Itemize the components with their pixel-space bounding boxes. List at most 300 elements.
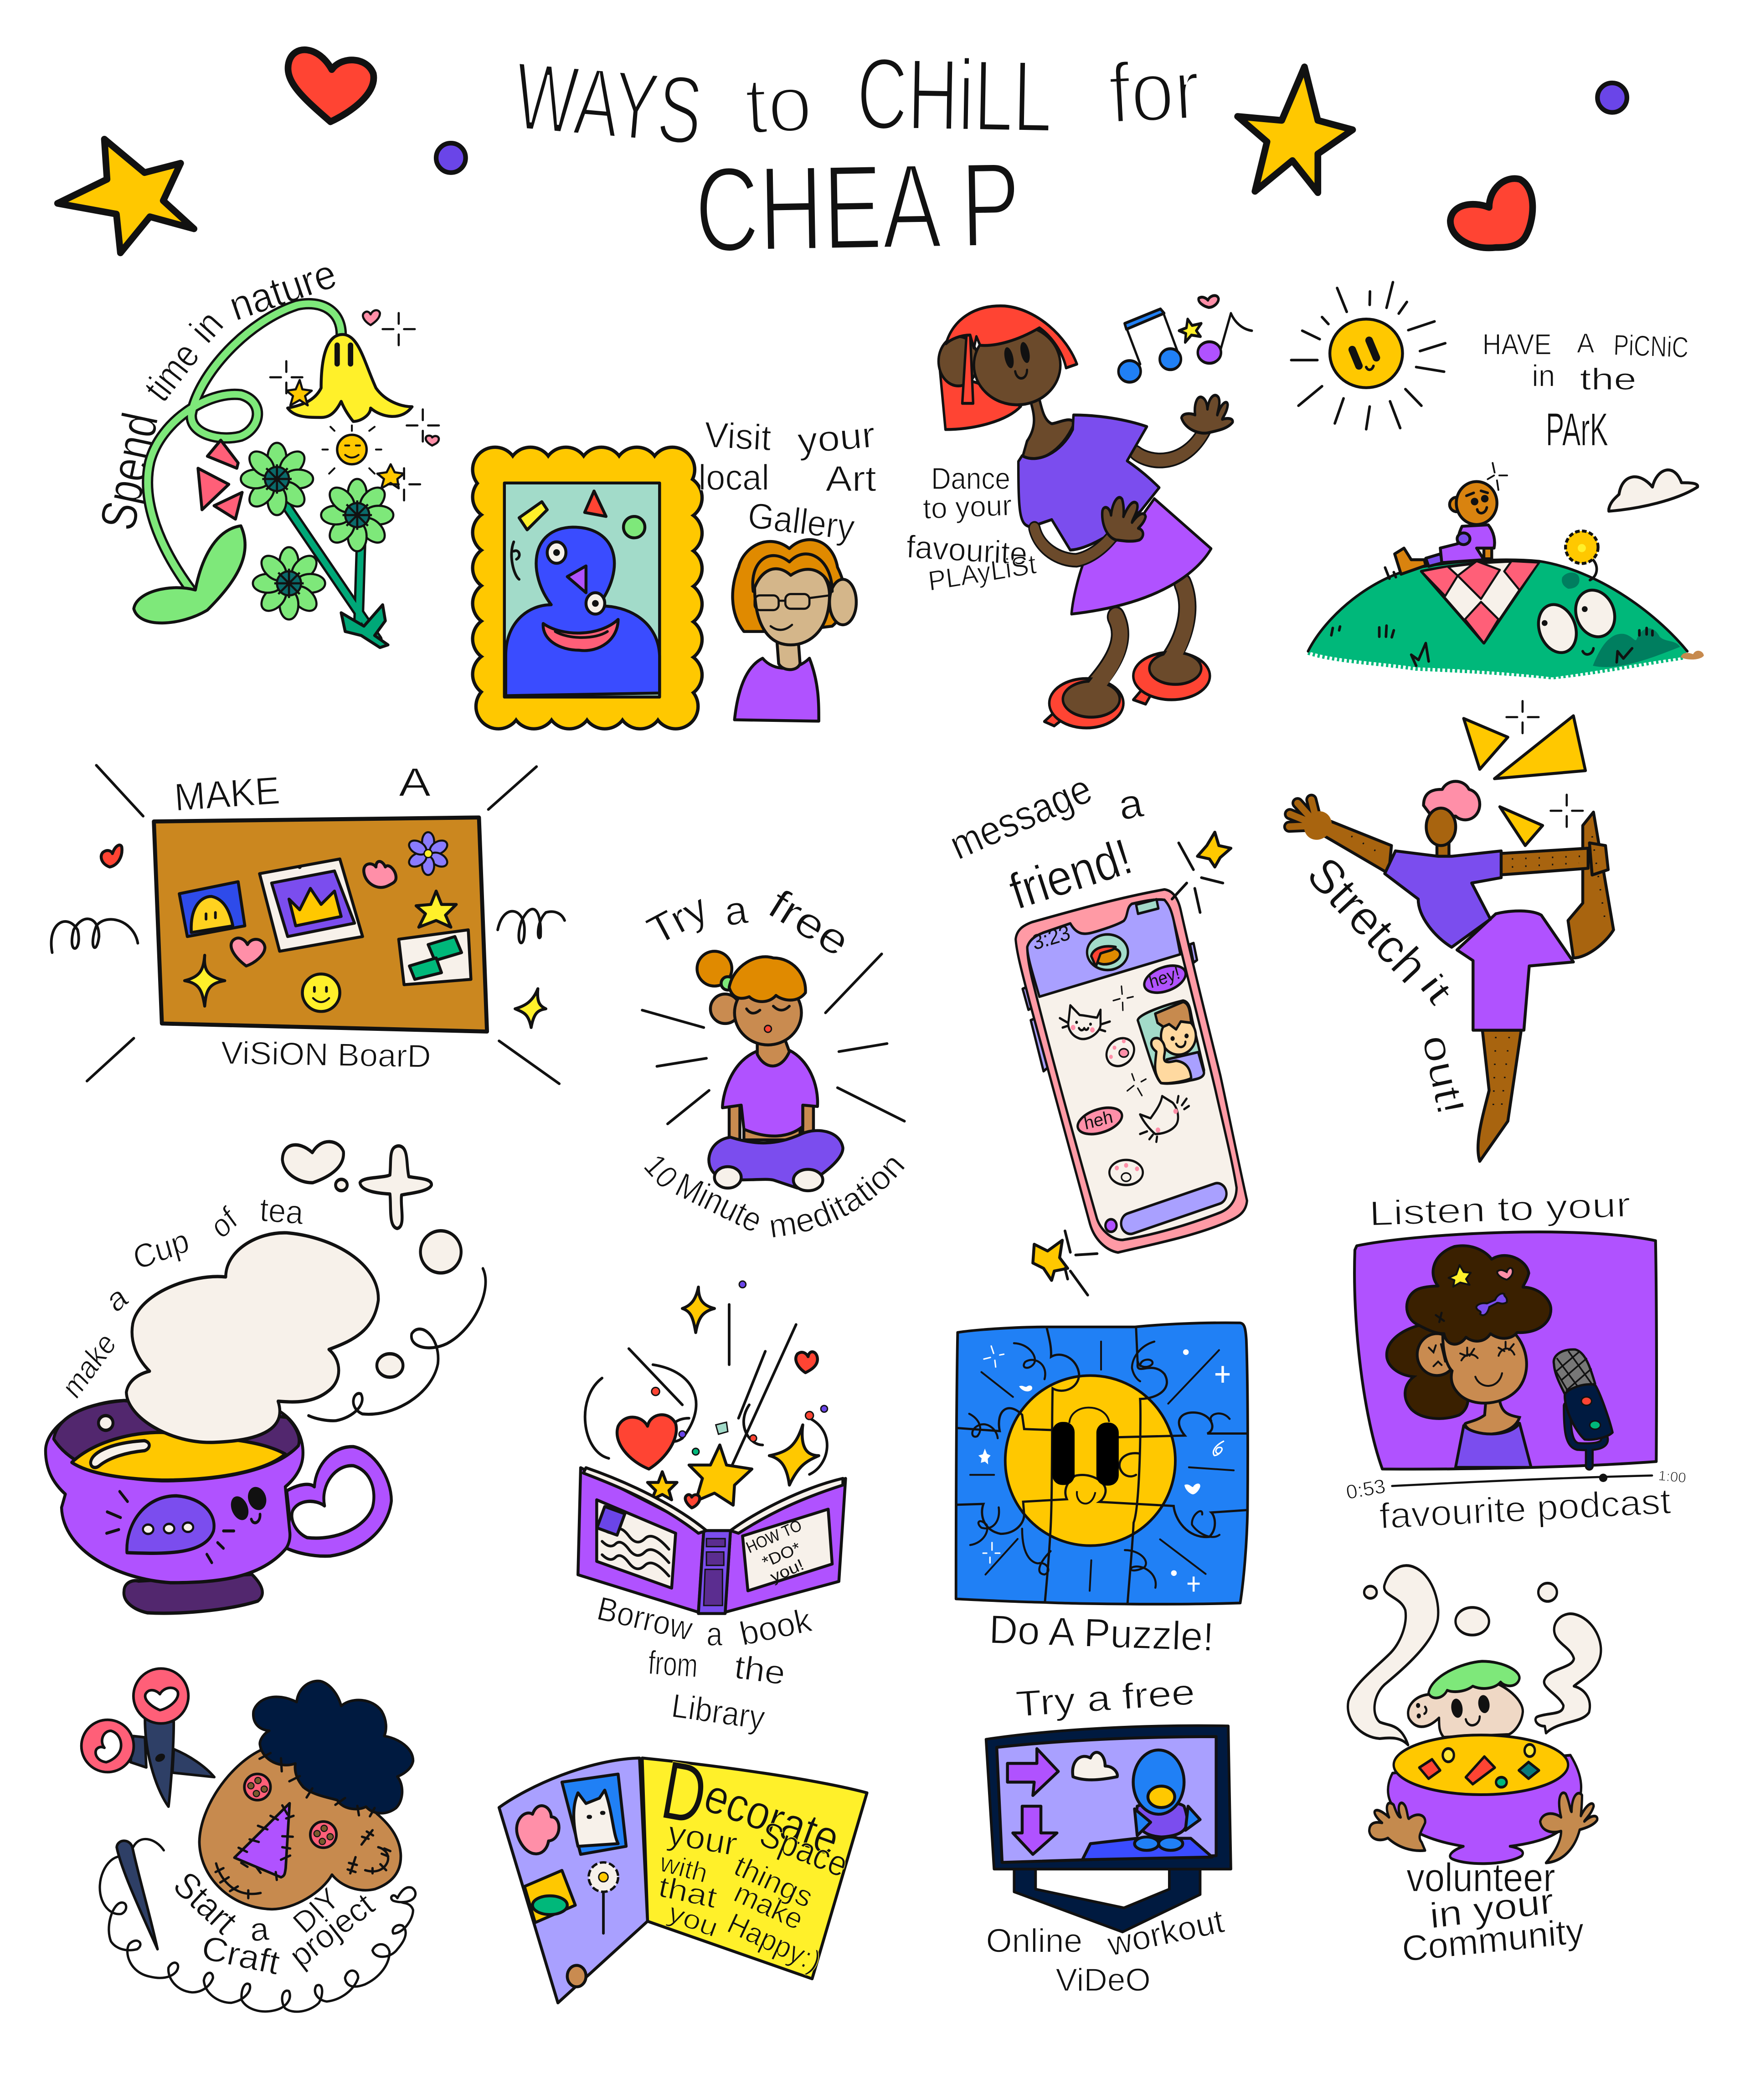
label: Library (669, 1687, 767, 1737)
send dot (1106, 1219, 1117, 1232)
tiny sun (323, 426, 381, 474)
label: spend time in nature: in (182, 302, 232, 351)
spine (698, 1531, 731, 1614)
cat doodle 2 (1140, 1096, 1189, 1142)
label: Community (1400, 1910, 1585, 1969)
label: favourite (906, 529, 1028, 571)
bowl body (1388, 1755, 1581, 1863)
back hair (940, 371, 1021, 429)
podcast illustration (1344, 1185, 1687, 1536)
text on page: ecorate (697, 1768, 847, 1866)
label: tea (259, 1191, 305, 1231)
neck (1022, 399, 1074, 460)
rays (642, 954, 905, 1124)
panel: message a friend (943, 766, 1247, 1295)
left page (597, 1500, 676, 1588)
small red heart (796, 1352, 818, 1373)
star: top right (1238, 67, 1353, 193)
side sparkle (769, 1425, 819, 1485)
clover shadow (1562, 572, 1580, 589)
label: ViSiON BoarD (221, 1035, 431, 1074)
label: start a diy (165, 1864, 346, 1949)
label: a (100, 1277, 134, 1320)
label: 10 minute meditation (637, 1146, 912, 1245)
panel: do a puzzle (956, 1323, 1248, 1659)
legs (709, 1131, 843, 1188)
hair (253, 1681, 413, 1813)
head (1408, 1677, 1523, 1737)
left cover (578, 1468, 704, 1612)
star bottom (1033, 1240, 1068, 1281)
steam bubbles (1364, 1583, 1557, 1635)
left hand (1369, 1803, 1425, 1851)
side buttons (1023, 943, 1197, 1071)
book page text: *DO* (760, 1539, 803, 1571)
hill face (1532, 585, 1621, 658)
legs over shoes (1094, 583, 1187, 690)
label (906, 462, 1038, 597)
friend photo (1138, 1001, 1204, 1084)
stitches (216, 1753, 390, 1898)
screen (997, 1737, 1216, 1863)
dot: purple right (1597, 83, 1627, 113)
right page (742, 1509, 832, 1591)
face features (1429, 1342, 1514, 1386)
pink flower (517, 1806, 559, 1854)
dark patch (1593, 628, 1680, 667)
label: workout: workout (1104, 1902, 1227, 1963)
text on page: that (656, 1870, 720, 1915)
speech bubble (127, 1496, 214, 1553)
sparkle yellow (682, 1287, 715, 1333)
title: for (1107, 41, 1202, 141)
label (698, 414, 877, 548)
text on page: make (729, 1876, 808, 1936)
side band (962, 335, 973, 403)
right steam (1535, 1614, 1601, 1733)
spine details (704, 1539, 725, 1606)
smile (1015, 370, 1027, 378)
sun rays (1291, 282, 1445, 429)
money card (399, 930, 471, 985)
smiley (302, 974, 340, 1011)
yellow triangles (1464, 716, 1585, 845)
person on hill (1395, 482, 1497, 574)
battery (1136, 899, 1158, 914)
label: spend time in nature: nature (223, 251, 342, 329)
label: start a diy: DIY (286, 1881, 346, 1940)
soup items (1419, 1745, 1539, 1787)
label: the (1580, 362, 1637, 396)
cup smile (251, 1514, 260, 1523)
waving hand (1181, 395, 1233, 433)
label: favourite podcast: favourite podcast (1378, 1481, 1672, 1536)
clock: 3:23 (1030, 921, 1072, 955)
text on page: with (656, 1848, 711, 1889)
label: craft project: project (283, 1886, 381, 1975)
hair star (1449, 1265, 1471, 1287)
head (735, 981, 802, 1045)
cream circle (421, 1231, 461, 1273)
hair candy (1476, 1293, 1507, 1315)
panel: online workout video (986, 1671, 1231, 1997)
pink heart (364, 861, 396, 887)
label: start a diy: Start (165, 1864, 245, 1942)
leaf (134, 526, 245, 623)
foot leaf (341, 605, 388, 648)
label: your (796, 414, 877, 461)
hair (729, 957, 806, 1002)
right cover (725, 1478, 845, 1612)
needle (117, 1841, 158, 1949)
panel: start a DIY craft project (82, 1668, 416, 2012)
daisy (1565, 531, 1598, 580)
yellow flower (288, 335, 412, 422)
panel: volunteer in your community (1348, 1565, 1601, 1969)
label (1297, 847, 1473, 1118)
sparkles (1113, 986, 1146, 1096)
text on page: Happy:) (722, 1907, 826, 1978)
label: a (1115, 780, 1147, 829)
label: Do A Puzzle! (988, 1606, 1215, 1659)
nose arc (1069, 1408, 1109, 1503)
lines near star bottom (1065, 1231, 1097, 1295)
hair (1424, 781, 1480, 820)
neck (1437, 836, 1449, 858)
sparkle lines (1488, 463, 1507, 490)
ear (938, 336, 978, 386)
cloud (1609, 470, 1698, 511)
label: friend! (1003, 828, 1138, 920)
label: in (1532, 359, 1555, 393)
text on page: you (664, 1898, 722, 1943)
front arm (1035, 528, 1116, 560)
purple screen (1354, 1232, 1657, 1469)
heart: top left (288, 50, 374, 122)
purple patch (234, 1803, 289, 1877)
phone body (1016, 890, 1247, 1252)
mouth (765, 1025, 772, 1032)
tea (72, 1432, 285, 1480)
label: 10 minute meditation: Minute (669, 1166, 768, 1240)
label: PArK (1546, 404, 1608, 456)
skirt (1457, 911, 1573, 1030)
swirls (969, 1342, 1230, 1588)
cat doodle (1060, 1005, 1110, 1039)
tiny heart (685, 1495, 700, 1508)
book page text: you! (767, 1556, 807, 1586)
skirt (1071, 499, 1211, 614)
grass edge (1308, 653, 1683, 677)
green stem (148, 304, 341, 589)
confetti dots (652, 1281, 828, 1455)
panel: 10 minute meditation (637, 880, 912, 1245)
head (1426, 808, 1456, 845)
front hair (1407, 1246, 1551, 1344)
rays (970, 1342, 1234, 1591)
left page (499, 1758, 648, 2003)
text on page (655, 1743, 854, 1978)
standing leg (1478, 1030, 1521, 1161)
cork board (154, 818, 487, 1031)
daisy (589, 1863, 618, 1933)
text on page: D (655, 1743, 714, 1842)
hill (1308, 560, 1687, 677)
closed eyes (746, 1006, 789, 1013)
arrow down (1013, 1806, 1057, 1854)
elapsed time: 0:53 (1344, 1475, 1387, 1504)
label: a (706, 1616, 722, 1653)
mic stand inner (1567, 1406, 1605, 1466)
fringe (946, 306, 1077, 368)
hair band (721, 977, 735, 990)
label: MAKE (173, 769, 281, 819)
title: to (743, 58, 814, 151)
panel: dance to your favourite playlist (906, 296, 1252, 728)
penguin (1133, 1750, 1200, 1850)
label: listen to your: Listen to your (1369, 1185, 1631, 1233)
star: top left (57, 139, 194, 253)
title: CHEA P (694, 137, 1021, 277)
panel: visit your local art gallery (489, 414, 877, 721)
back hair (1387, 1326, 1468, 1419)
small heart (101, 845, 122, 867)
burst lines (629, 1304, 796, 1472)
shirt (1019, 415, 1159, 550)
label: volunteer (1406, 1855, 1555, 1900)
phone (1016, 890, 1247, 1252)
cup base (124, 1575, 262, 1613)
avatar (1087, 934, 1128, 970)
legs (1086, 583, 1187, 694)
tiny head (567, 1966, 586, 1987)
doll body (199, 1750, 401, 1909)
foot hand (1590, 843, 1608, 875)
picnic blanket (1421, 561, 1539, 643)
cup handle (285, 1446, 391, 1556)
title: WAYS (510, 42, 706, 165)
left hand (1284, 794, 1339, 847)
label: A (1577, 328, 1595, 359)
cup interior (54, 1400, 299, 1481)
x mark (1436, 1313, 1444, 1322)
face (1443, 1328, 1527, 1403)
mic stand (1567, 1406, 1605, 1466)
cup eyes (227, 1483, 270, 1524)
stand (1014, 1868, 1200, 1932)
monitor (986, 1726, 1231, 1869)
book page text: HOW TO (743, 1517, 804, 1557)
shirt (722, 1050, 818, 1136)
sparkle on board (185, 955, 225, 1006)
label: in your (1428, 1881, 1555, 1936)
feet (715, 1167, 823, 1191)
label: craft project: Craft (198, 1928, 283, 1982)
label: HAVE (1482, 328, 1552, 360)
sparkles (1507, 701, 1583, 827)
label: make (56, 1325, 122, 1405)
mic buttons (1581, 1397, 1601, 1429)
label: try a free: Try (640, 885, 715, 953)
label (56, 1191, 305, 1405)
flowers (241, 443, 393, 619)
progress knob (1599, 1474, 1607, 1482)
brown pebble (1681, 651, 1704, 659)
bubble: heh: heh (1082, 1107, 1115, 1133)
label: spend time in nature: time (136, 334, 208, 409)
lines near star top (1172, 843, 1223, 912)
paw prints (1102, 1033, 1143, 1185)
cloud (1073, 1752, 1117, 1780)
progress bar (1392, 1476, 1652, 1486)
label: spend time in nature (89, 251, 342, 535)
stems (283, 502, 377, 639)
right shoe (1133, 652, 1210, 704)
eyes (1052, 1422, 1119, 1486)
big star (689, 1445, 752, 1505)
label (943, 766, 1147, 920)
rim bubble (98, 1415, 113, 1431)
small circle (335, 1179, 347, 1191)
label: try a free: a (721, 886, 750, 934)
right arm (1136, 429, 1205, 460)
panel: listen to your favourite podcast (1344, 1185, 1687, 1536)
panel: make a vision board (51, 760, 565, 1084)
arrow right (1008, 1749, 1058, 1796)
star top (1198, 832, 1231, 867)
cup body (46, 1400, 303, 1583)
label: from (647, 1644, 699, 1684)
steam cloud (126, 1233, 378, 1442)
bubble dots (143, 1523, 193, 1534)
eyes (1416, 1694, 1491, 1719)
header (1027, 900, 1180, 997)
ear (1417, 1333, 1457, 1375)
frog poster (525, 1870, 575, 1923)
pink heart small (231, 938, 265, 966)
swirls (585, 1364, 827, 1474)
scissors (82, 1668, 214, 1807)
person with glasses (733, 540, 856, 721)
bun (697, 951, 732, 986)
large red heart (617, 1415, 676, 1469)
grass marks (1331, 567, 1652, 666)
shirt (1385, 851, 1501, 947)
panel: spend time in nature (89, 251, 439, 648)
panel: stretch it out (1284, 701, 1614, 1161)
right page (642, 1758, 867, 1979)
raised leg (1568, 812, 1614, 958)
cat poster (562, 1774, 626, 1854)
label: Visit (703, 414, 772, 458)
label: to your (922, 489, 1012, 525)
title: CHiLL (856, 37, 1053, 154)
yellow star (416, 891, 456, 927)
neck (757, 1037, 789, 1066)
grille lines (1554, 1351, 1591, 1392)
thread scallop (100, 1839, 416, 2012)
yellow sun (1005, 1375, 1175, 1546)
painting (504, 483, 659, 697)
text on page: your (665, 1814, 740, 1863)
input bar (1119, 1181, 1229, 1236)
bubble: heh (1075, 1103, 1125, 1139)
crown card (260, 859, 363, 951)
label: message (943, 766, 1099, 869)
mic body (1565, 1385, 1612, 1440)
left steam (1348, 1565, 1438, 1745)
label: A (399, 760, 431, 805)
label: local (698, 457, 769, 497)
label (1400, 1855, 1585, 1969)
panel: decorate your space (499, 1743, 867, 2003)
label: 10 minute meditation: 10 (637, 1147, 685, 1195)
white sparkles (983, 1346, 1224, 1563)
label: craft project (198, 1886, 381, 1982)
green hair (1429, 1661, 1519, 1698)
shirt (1456, 1423, 1531, 1467)
phone screen (1027, 900, 1236, 1240)
cream heart (283, 1142, 344, 1183)
chick card (179, 882, 245, 937)
neck (1465, 1401, 1519, 1434)
puzzle seams (957, 1327, 1247, 1604)
label: the (732, 1648, 788, 1692)
small star (648, 1472, 677, 1500)
left arm (1318, 819, 1391, 874)
face (974, 325, 1060, 405)
eyes (1003, 341, 1031, 370)
cup marks (107, 1492, 234, 1563)
white stars and hearts (978, 1349, 1230, 1591)
label: online: Online (986, 1922, 1082, 1959)
dot: purple left (436, 143, 466, 173)
label: start a diy: a (248, 1911, 270, 1949)
panel: make a cup of tea (46, 1142, 486, 1613)
scalloped frame (489, 463, 686, 713)
page edges (583, 1468, 843, 1533)
label: Art (825, 458, 876, 499)
panel: have a picnic in the park (1291, 282, 1704, 677)
right hand (1540, 1793, 1597, 1863)
hill outline (1308, 560, 1687, 651)
text on page: things (729, 1849, 818, 1914)
platform (1082, 1838, 1212, 1860)
book page text (743, 1517, 807, 1586)
title (510, 37, 1202, 277)
puzzle illustration (956, 1323, 1248, 1604)
label: Cup (129, 1221, 193, 1277)
label: Stretch (1297, 847, 1438, 993)
label: out! (1414, 1031, 1473, 1118)
raised arm (1498, 848, 1588, 875)
waist (744, 1108, 800, 1140)
label: 10 minute meditation: meditation (767, 1146, 912, 1245)
mini picture (597, 1507, 625, 1535)
microphone grille (1554, 1349, 1595, 1394)
button two (310, 1822, 336, 1848)
flower eyes (337, 345, 350, 364)
wavy lines (602, 1528, 669, 1576)
duration: 1:00 (1657, 1468, 1687, 1486)
label: PiCNiC (1613, 329, 1689, 364)
bubble: hey: hey! (1147, 963, 1182, 992)
arms (729, 1104, 813, 1144)
label: Gallery (746, 494, 857, 548)
bubble: hey (1141, 961, 1189, 998)
label: spend time in nature: Spend (89, 408, 169, 535)
small stars, heart, sparkles (270, 310, 439, 500)
